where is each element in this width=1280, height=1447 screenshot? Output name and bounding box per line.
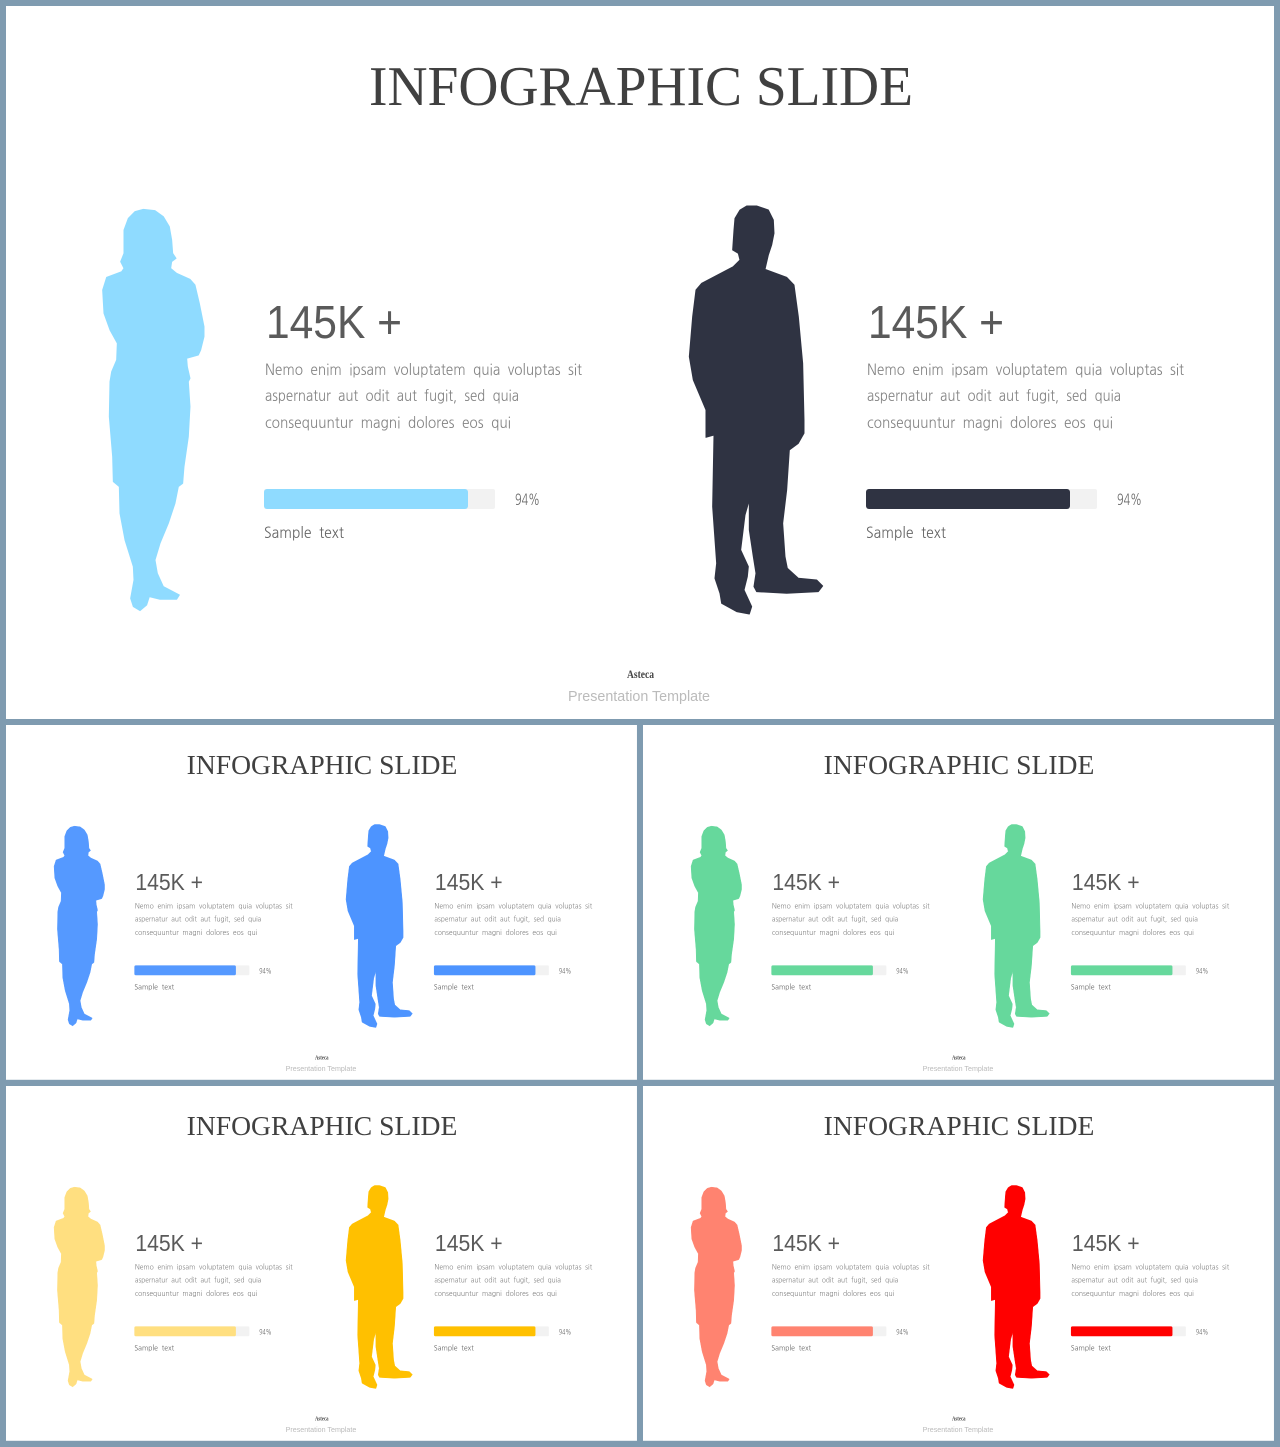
title: INFOGRAPHIC SLIDE xyxy=(369,56,913,118)
description left: consequuntur magni dolores eos qui xyxy=(772,929,894,937)
percent right: 94% xyxy=(1196,1329,1208,1336)
bar label left: Sample text xyxy=(134,984,174,992)
description right: consequuntur magni dolores eos qui xyxy=(867,416,1113,431)
progress bar right xyxy=(1071,965,1186,975)
description left: aspernatur aut odit aut fugit, sed quia xyxy=(135,1277,261,1285)
description right: aspernatur aut odit aut fugit, sed quia xyxy=(434,1277,561,1285)
description left xyxy=(265,363,582,431)
description left: consequuntur magni dolores eos qui xyxy=(135,929,257,937)
icon: woman silhouette xyxy=(691,1187,742,1387)
description right: consequuntur magni dolores eos qui xyxy=(434,1290,557,1298)
percent left: 94% xyxy=(259,1329,272,1336)
footer brand: Asteca xyxy=(315,1416,328,1422)
icon: man silhouette xyxy=(689,206,823,614)
icon: woman silhouette xyxy=(54,826,105,1026)
description right: Nemo enim ipsam voluptatem quia voluptas sit xyxy=(1071,903,1229,911)
footer subtitle: Presentation Template xyxy=(923,1064,993,1073)
icon: man silhouette xyxy=(983,825,1049,1028)
description left: consequuntur magni dolores eos qui xyxy=(772,1290,894,1298)
stat value left: 145K + xyxy=(135,869,203,895)
progress bar right xyxy=(434,965,549,975)
panel: blue slide xyxy=(6,725,637,1080)
stat value left: 145K + xyxy=(135,1230,203,1256)
description right: consequuntur magni dolores eos qui xyxy=(434,929,557,937)
progress bar left xyxy=(771,1326,886,1336)
percent left: 94% xyxy=(515,493,540,508)
icon: woman silhouette xyxy=(103,209,204,611)
description right xyxy=(434,1264,592,1298)
icon: man silhouette xyxy=(346,1186,412,1389)
progress bar right xyxy=(866,489,1097,509)
footer brand: Asteca xyxy=(315,1055,328,1061)
description right: aspernatur aut odit aut fugit, sed quia xyxy=(1071,916,1198,924)
bar label left: Sample text xyxy=(771,984,811,992)
stat value left: 145K + xyxy=(266,296,402,348)
description left: Nemo enim ipsam voluptatem quia voluptas sit xyxy=(772,903,930,911)
progress bar left xyxy=(771,965,886,975)
title: INFOGRAPHIC SLIDE xyxy=(187,750,457,781)
progress bar left xyxy=(134,965,249,975)
stat value right: 145K + xyxy=(1072,869,1140,895)
description right xyxy=(434,903,592,937)
description left: aspernatur aut odit aut fugit, sed quia xyxy=(135,916,261,924)
icon: man silhouette xyxy=(346,825,412,1028)
stat value left: 145K + xyxy=(772,869,840,895)
footer brand: Asteca xyxy=(952,1055,965,1061)
percent left: 94% xyxy=(896,968,909,975)
title: INFOGRAPHIC SLIDE xyxy=(824,1111,1094,1142)
icon: woman silhouette xyxy=(691,826,742,1026)
stat value right: 145K + xyxy=(435,1230,503,1256)
description left xyxy=(135,1264,293,1298)
description left: Nemo enim ipsam voluptatem quia voluptas sit xyxy=(265,363,582,378)
description left: consequuntur magni dolores eos qui xyxy=(135,1290,257,1298)
icon: woman silhouette xyxy=(54,1187,105,1387)
description right: aspernatur aut odit aut fugit, sed quia xyxy=(434,916,561,924)
description left xyxy=(772,903,930,937)
bar label left: Sample text xyxy=(264,526,345,541)
description left: Nemo enim ipsam voluptatem quia voluptas sit xyxy=(135,903,293,911)
icon: man silhouette xyxy=(983,1186,1049,1389)
description right: aspernatur aut odit aut fugit, sed quia xyxy=(867,389,1121,404)
stat value right: 145K + xyxy=(1072,1230,1140,1256)
title: INFOGRAPHIC SLIDE xyxy=(824,750,1094,781)
progress bar left xyxy=(264,489,495,509)
description right: aspernatur aut odit aut fugit, sed quia xyxy=(1071,1277,1198,1285)
description left: aspernatur aut odit aut fugit, sed quia xyxy=(772,916,898,924)
title: INFOGRAPHIC SLIDE xyxy=(187,1111,457,1142)
description left: consequuntur magni dolores eos qui xyxy=(265,416,511,431)
description right: Nemo enim ipsam voluptatem quia voluptas sit xyxy=(1071,1264,1229,1272)
description right: Nemo enim ipsam voluptatem quia voluptas sit xyxy=(434,903,592,911)
footer brand: Asteca xyxy=(627,667,654,681)
description left: Nemo enim ipsam voluptatem quia voluptas sit xyxy=(772,1264,930,1272)
progress bar left xyxy=(134,1326,249,1336)
description right xyxy=(1071,1264,1229,1298)
percent right: 94% xyxy=(559,1329,571,1336)
description right: consequuntur magni dolores eos qui xyxy=(1071,1290,1194,1298)
footer brand: Asteca xyxy=(952,1416,965,1422)
description right xyxy=(1071,903,1229,937)
percent right: 94% xyxy=(1196,968,1208,975)
percent right: 94% xyxy=(559,968,571,975)
description left: aspernatur aut odit aut fugit, sed quia xyxy=(265,389,519,404)
description right: Nemo enim ipsam voluptatem quia voluptas sit xyxy=(867,363,1184,378)
bar label left: Sample text xyxy=(134,1345,174,1353)
description right: Nemo enim ipsam voluptatem quia voluptas sit xyxy=(434,1264,592,1272)
footer subtitle: Presentation Template xyxy=(923,1425,993,1434)
description right: consequuntur magni dolores eos qui xyxy=(1071,929,1194,937)
bar label right: Sample text xyxy=(1071,984,1111,992)
progress bar right xyxy=(434,1326,549,1336)
footer subtitle: Presentation Template xyxy=(568,688,710,705)
description left xyxy=(135,903,293,937)
stat value right: 145K + xyxy=(868,296,1004,348)
panel: green slide xyxy=(643,725,1274,1080)
panel: large slide, light blue and navy xyxy=(6,6,1274,719)
percent left: 94% xyxy=(259,968,272,975)
percent right: 94% xyxy=(1117,493,1142,508)
footer subtitle: Presentation Template xyxy=(286,1064,356,1073)
bar label right: Sample text xyxy=(434,1345,474,1353)
bar label right: Sample text xyxy=(434,984,474,992)
description right xyxy=(867,363,1184,431)
bar label right: Sample text xyxy=(1071,1345,1111,1353)
stat value right: 145K + xyxy=(435,869,503,895)
description left: Nemo enim ipsam voluptatem quia voluptas sit xyxy=(135,1264,293,1272)
progress bar right xyxy=(1071,1326,1186,1336)
panel: red slide xyxy=(643,1086,1274,1441)
bar label left: Sample text xyxy=(771,1345,811,1353)
bar label right: Sample text xyxy=(866,526,947,541)
percent left: 94% xyxy=(896,1329,909,1336)
description left: aspernatur aut odit aut fugit, sed quia xyxy=(772,1277,898,1285)
stat value left: 145K + xyxy=(772,1230,840,1256)
panel: yellow slide xyxy=(6,1086,637,1441)
footer subtitle: Presentation Template xyxy=(286,1425,356,1434)
description left xyxy=(772,1264,930,1298)
